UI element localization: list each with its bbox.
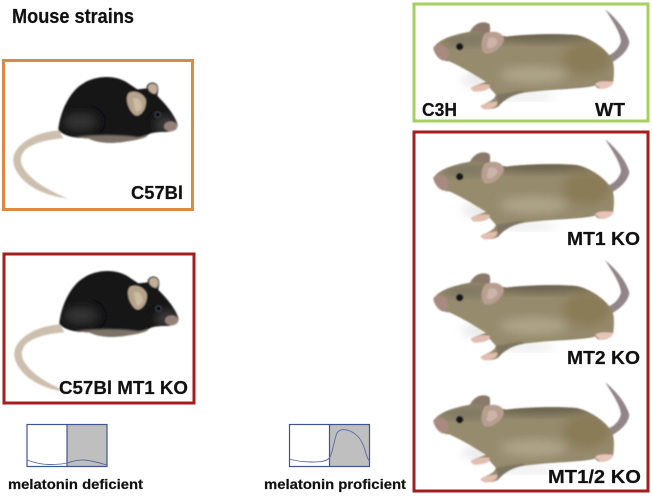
- label: MT1/2 KO: MT1/2 KO: [548, 467, 641, 487]
- panel: C57Bl MT1 KO: [4, 254, 194, 403]
- chart: melatonin proficient: [290, 424, 370, 466]
- icon: black mouse knockout: [14, 264, 184, 393]
- panel: C57Bl: [4, 60, 192, 210]
- label: MT2 KO: MT2 KO: [567, 348, 640, 368]
- label: C3H: C3H: [422, 100, 457, 120]
- icon: MT1 KO mouse: [433, 139, 629, 239]
- icon: MT2 KO mouse: [433, 260, 629, 360]
- label: WT: WT: [595, 100, 625, 120]
- panel: knockout strains: [414, 132, 648, 491]
- label: C57Bl MT1 KO: C57Bl MT1 KO: [59, 378, 188, 398]
- label: melatonin proficient: melatonin proficient: [264, 476, 406, 492]
- label: C57Bl: C57Bl: [131, 183, 183, 203]
- icon: black mouse: [13, 70, 183, 199]
- title: Mouse strains: [12, 5, 134, 28]
- label: MT1 KO: MT1 KO: [567, 229, 640, 249]
- icon: brown mouse: [433, 9, 629, 109]
- label: melatonin deficient: melatonin deficient: [8, 476, 143, 492]
- panel: C3H WT: [414, 4, 648, 121]
- chart: melatonin deficient: [27, 424, 107, 466]
- icon: MT1/2 KO mouse: [433, 382, 629, 482]
